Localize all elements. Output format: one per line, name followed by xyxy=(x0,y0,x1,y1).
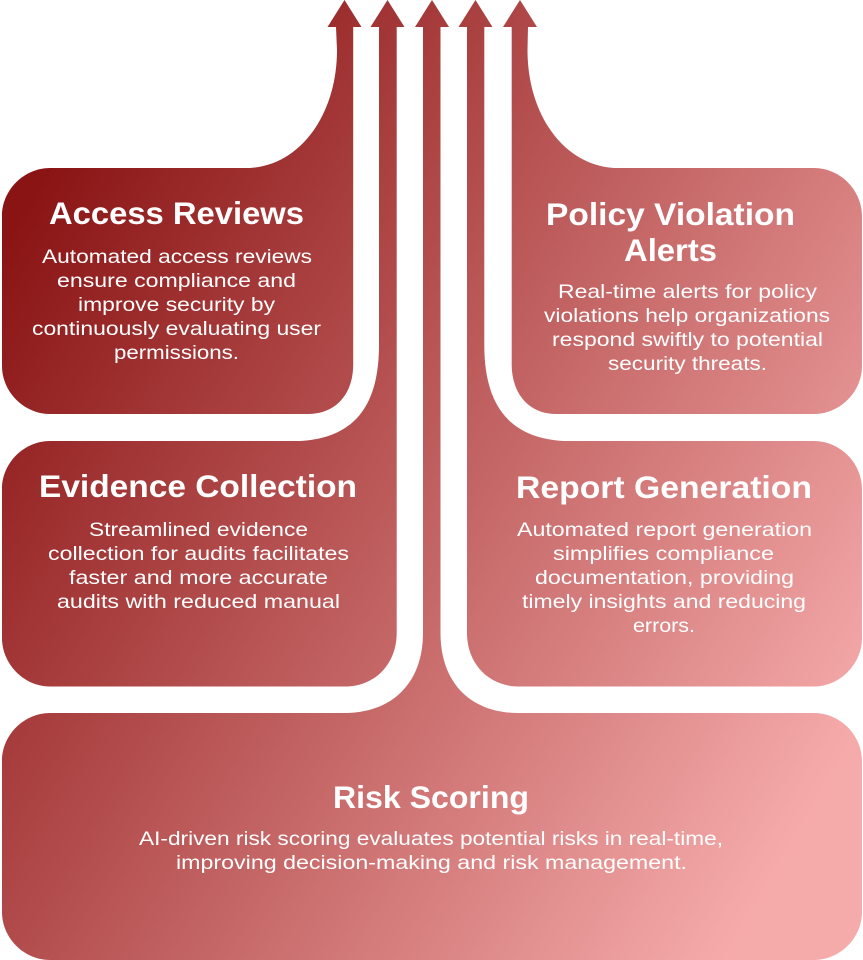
text: evidence collection body: faster and more accurate xyxy=(69,567,328,589)
card and arrow: report generation xyxy=(458,0,862,686)
text: access reviews body: ensure compliance and xyxy=(57,270,296,292)
heading: risk scoring: Risk Scoring xyxy=(333,779,529,815)
heading: access reviews: Access Reviews xyxy=(49,195,304,231)
panel: access reviews xyxy=(2,0,362,414)
text: access reviews body: Automated access reviews xyxy=(42,246,312,268)
card and arrow: access reviews xyxy=(2,0,362,414)
panel: report generation xyxy=(458,0,862,686)
text: risk scoring body: improving decision-making and risk management. xyxy=(176,852,687,874)
text: report generation body xyxy=(517,519,812,637)
text: access reviews body: improve security by xyxy=(78,294,275,316)
text: report generation body: errors. xyxy=(633,615,695,637)
heading: report generation: Report Generation xyxy=(516,469,812,505)
heading: policy violation alerts xyxy=(546,196,795,268)
text: evidence collection body xyxy=(48,519,349,613)
text: report generation body: documentation, providing xyxy=(535,567,794,589)
text: policy violation alerts body: security threats. xyxy=(608,353,767,375)
heading: evidence collection: Evidence Collection xyxy=(39,468,357,504)
text: report generation body: timely insights and reducing xyxy=(522,591,806,613)
text: access reviews body: continuously evaluating user xyxy=(32,318,322,340)
card and arrow: evidence collection xyxy=(2,0,404,686)
text: report generation body: Automated report generation xyxy=(517,519,812,541)
text: evidence collection body: collection for audits facilitates xyxy=(48,543,349,565)
text: access reviews body xyxy=(32,246,322,364)
text: policy violation alerts body xyxy=(544,281,830,375)
card and arrow: policy violation alerts xyxy=(503,0,862,414)
text: risk scoring body: AI-driven risk scoring evaluates potential risks in real-time, xyxy=(139,828,723,850)
text: access reviews body: permissions. xyxy=(114,342,239,364)
text: evidence collection body: audits with reduced manual xyxy=(57,591,340,613)
text: policy violation alerts body: respond swiftly to potential xyxy=(552,329,823,351)
heading: policy violation alerts: Policy Violation xyxy=(546,196,795,232)
text: evidence collection body: Streamlined evidence xyxy=(89,519,308,541)
text: policy violation alerts body: Real-time alerts for policy xyxy=(558,281,817,303)
panel: policy violation alerts xyxy=(503,0,862,414)
text: risk scoring body xyxy=(139,828,723,874)
panel: evidence collection xyxy=(2,0,404,686)
text: policy violation alerts body: violations help organizations xyxy=(544,305,830,327)
text: report generation body: simplifies compliance xyxy=(553,543,774,565)
heading: policy violation alerts: Alerts xyxy=(624,232,717,268)
